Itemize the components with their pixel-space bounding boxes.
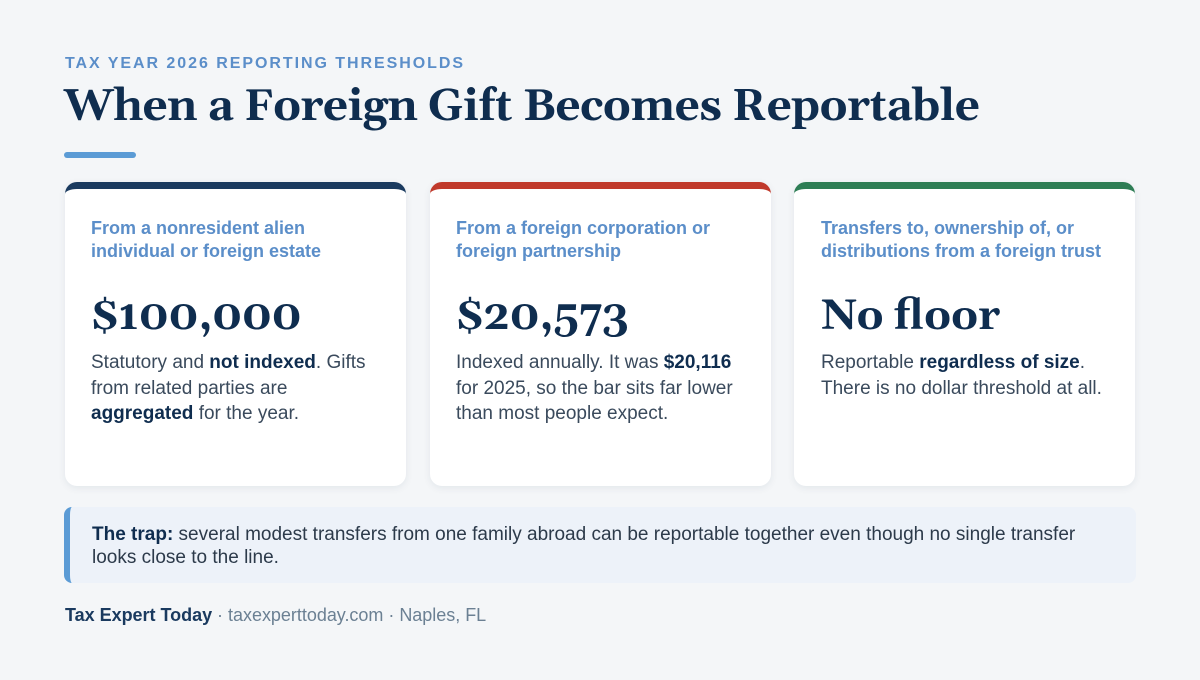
card 2 description: Indexed annually. It was $20,116	[456, 352, 731, 373]
panel: foreign trust	[794, 182, 1135, 486]
card 2 amount: $20,573	[456, 291, 629, 344]
card 3 description: There is no dollar threshold at all.	[821, 378, 1102, 398]
card 2 heading: From a foreign corporation or	[456, 218, 710, 238]
card 2 description: for 2025, so the bar sits far lower	[456, 378, 733, 398]
card 3 amount: No floor	[821, 291, 1000, 344]
card 1 description: Statutory and not indexed. Gifts	[91, 352, 366, 373]
card 2 description: than most people expect.	[456, 403, 668, 424]
card 1 heading	[91, 218, 321, 261]
card 3 heading	[821, 218, 1101, 261]
card 1 heading: From a nonresident alien	[91, 218, 305, 238]
card 3 description: Reportable regardless of size.	[821, 352, 1085, 373]
card 2 heading	[456, 218, 710, 261]
card 1 description: from related parties are	[91, 378, 287, 398]
card 1 amount: $100,000	[91, 291, 301, 344]
panel: nonresident alien individual or foreign estate	[65, 182, 406, 486]
panel: foreign corporation or partnership	[430, 182, 771, 486]
callout: the trap: The trap: several modest transfers from one family abroad can be reportable together even though no single transfer looks close to the line.	[92, 524, 1075, 568]
card 2 description	[456, 352, 733, 424]
title: When a Foreign Gift Becomes Reportable	[64, 80, 979, 136]
card 3 description	[821, 352, 1102, 398]
card 1 heading: individual or foreign estate	[91, 241, 321, 261]
card 2 heading: foreign partnership	[456, 241, 621, 261]
footer: Tax Expert Today · taxexperttoday.com · Naples, FL	[65, 605, 486, 625]
accent rule	[64, 152, 136, 158]
callout: the trap	[64, 507, 1136, 583]
card 1 description	[91, 352, 366, 424]
eyebrow label: TAX YEAR 2026 REPORTING THRESHOLDS	[65, 55, 465, 72]
card 1 description: aggregated for the year.	[91, 403, 299, 424]
card 3 heading: Transfers to, ownership of, or	[821, 218, 1074, 238]
card 3 heading: distributions from a foreign trust	[821, 241, 1101, 261]
